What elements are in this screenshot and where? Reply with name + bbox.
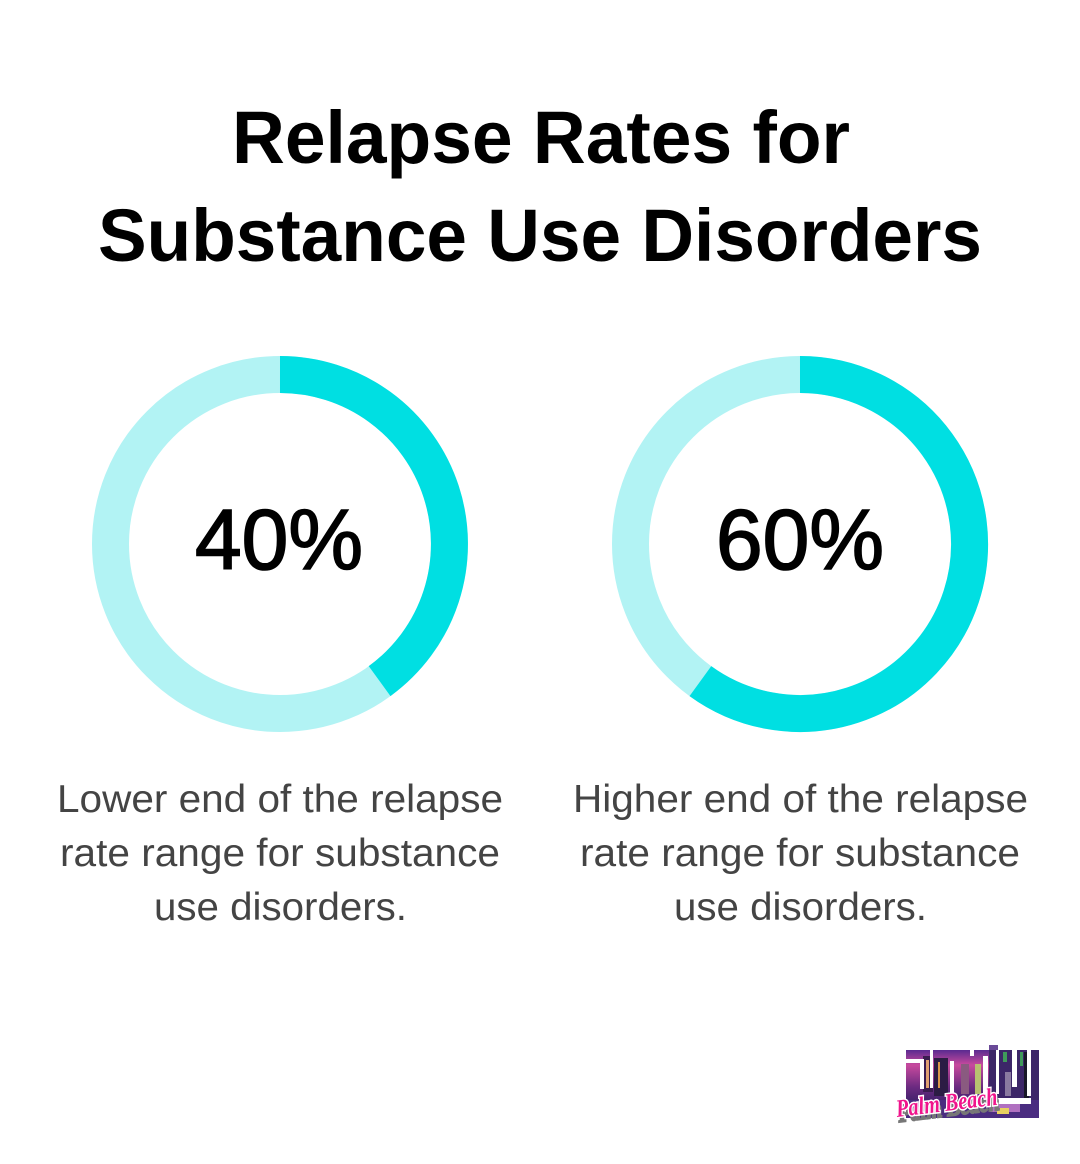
logo script: Palm Beach: Palm Beach [894,1084,999,1123]
description: lower end: rate range for substance [60,832,500,875]
description: higher end: rate range for substance [580,832,1020,875]
description: lower end: use disorders. [154,886,407,929]
donut chart: 40% [110,374,450,714]
panel: lower end 40% [57,374,503,929]
logo wordmark block [906,1045,1039,1118]
logo: Amity Palm Beach [894,1045,1039,1128]
value: 40%: 40% [195,493,363,588]
donut chart: 60% [630,374,970,714]
logo script: Palm Beach: Palm Beach [896,1089,1001,1128]
description: higher end: use disorders. [674,886,927,929]
description: higher end [573,778,1028,929]
description: higher end: Higher end of the relapse [573,778,1028,821]
description: lower end [57,778,503,929]
title [98,96,982,277]
description: lower end: Lower end of the relapse [57,778,503,821]
title: Substance Use Disorders [98,194,982,277]
title: Relapse Rates for [232,96,850,179]
panel: higher end 60% [573,374,1028,929]
value: 60%: 60% [716,493,884,588]
